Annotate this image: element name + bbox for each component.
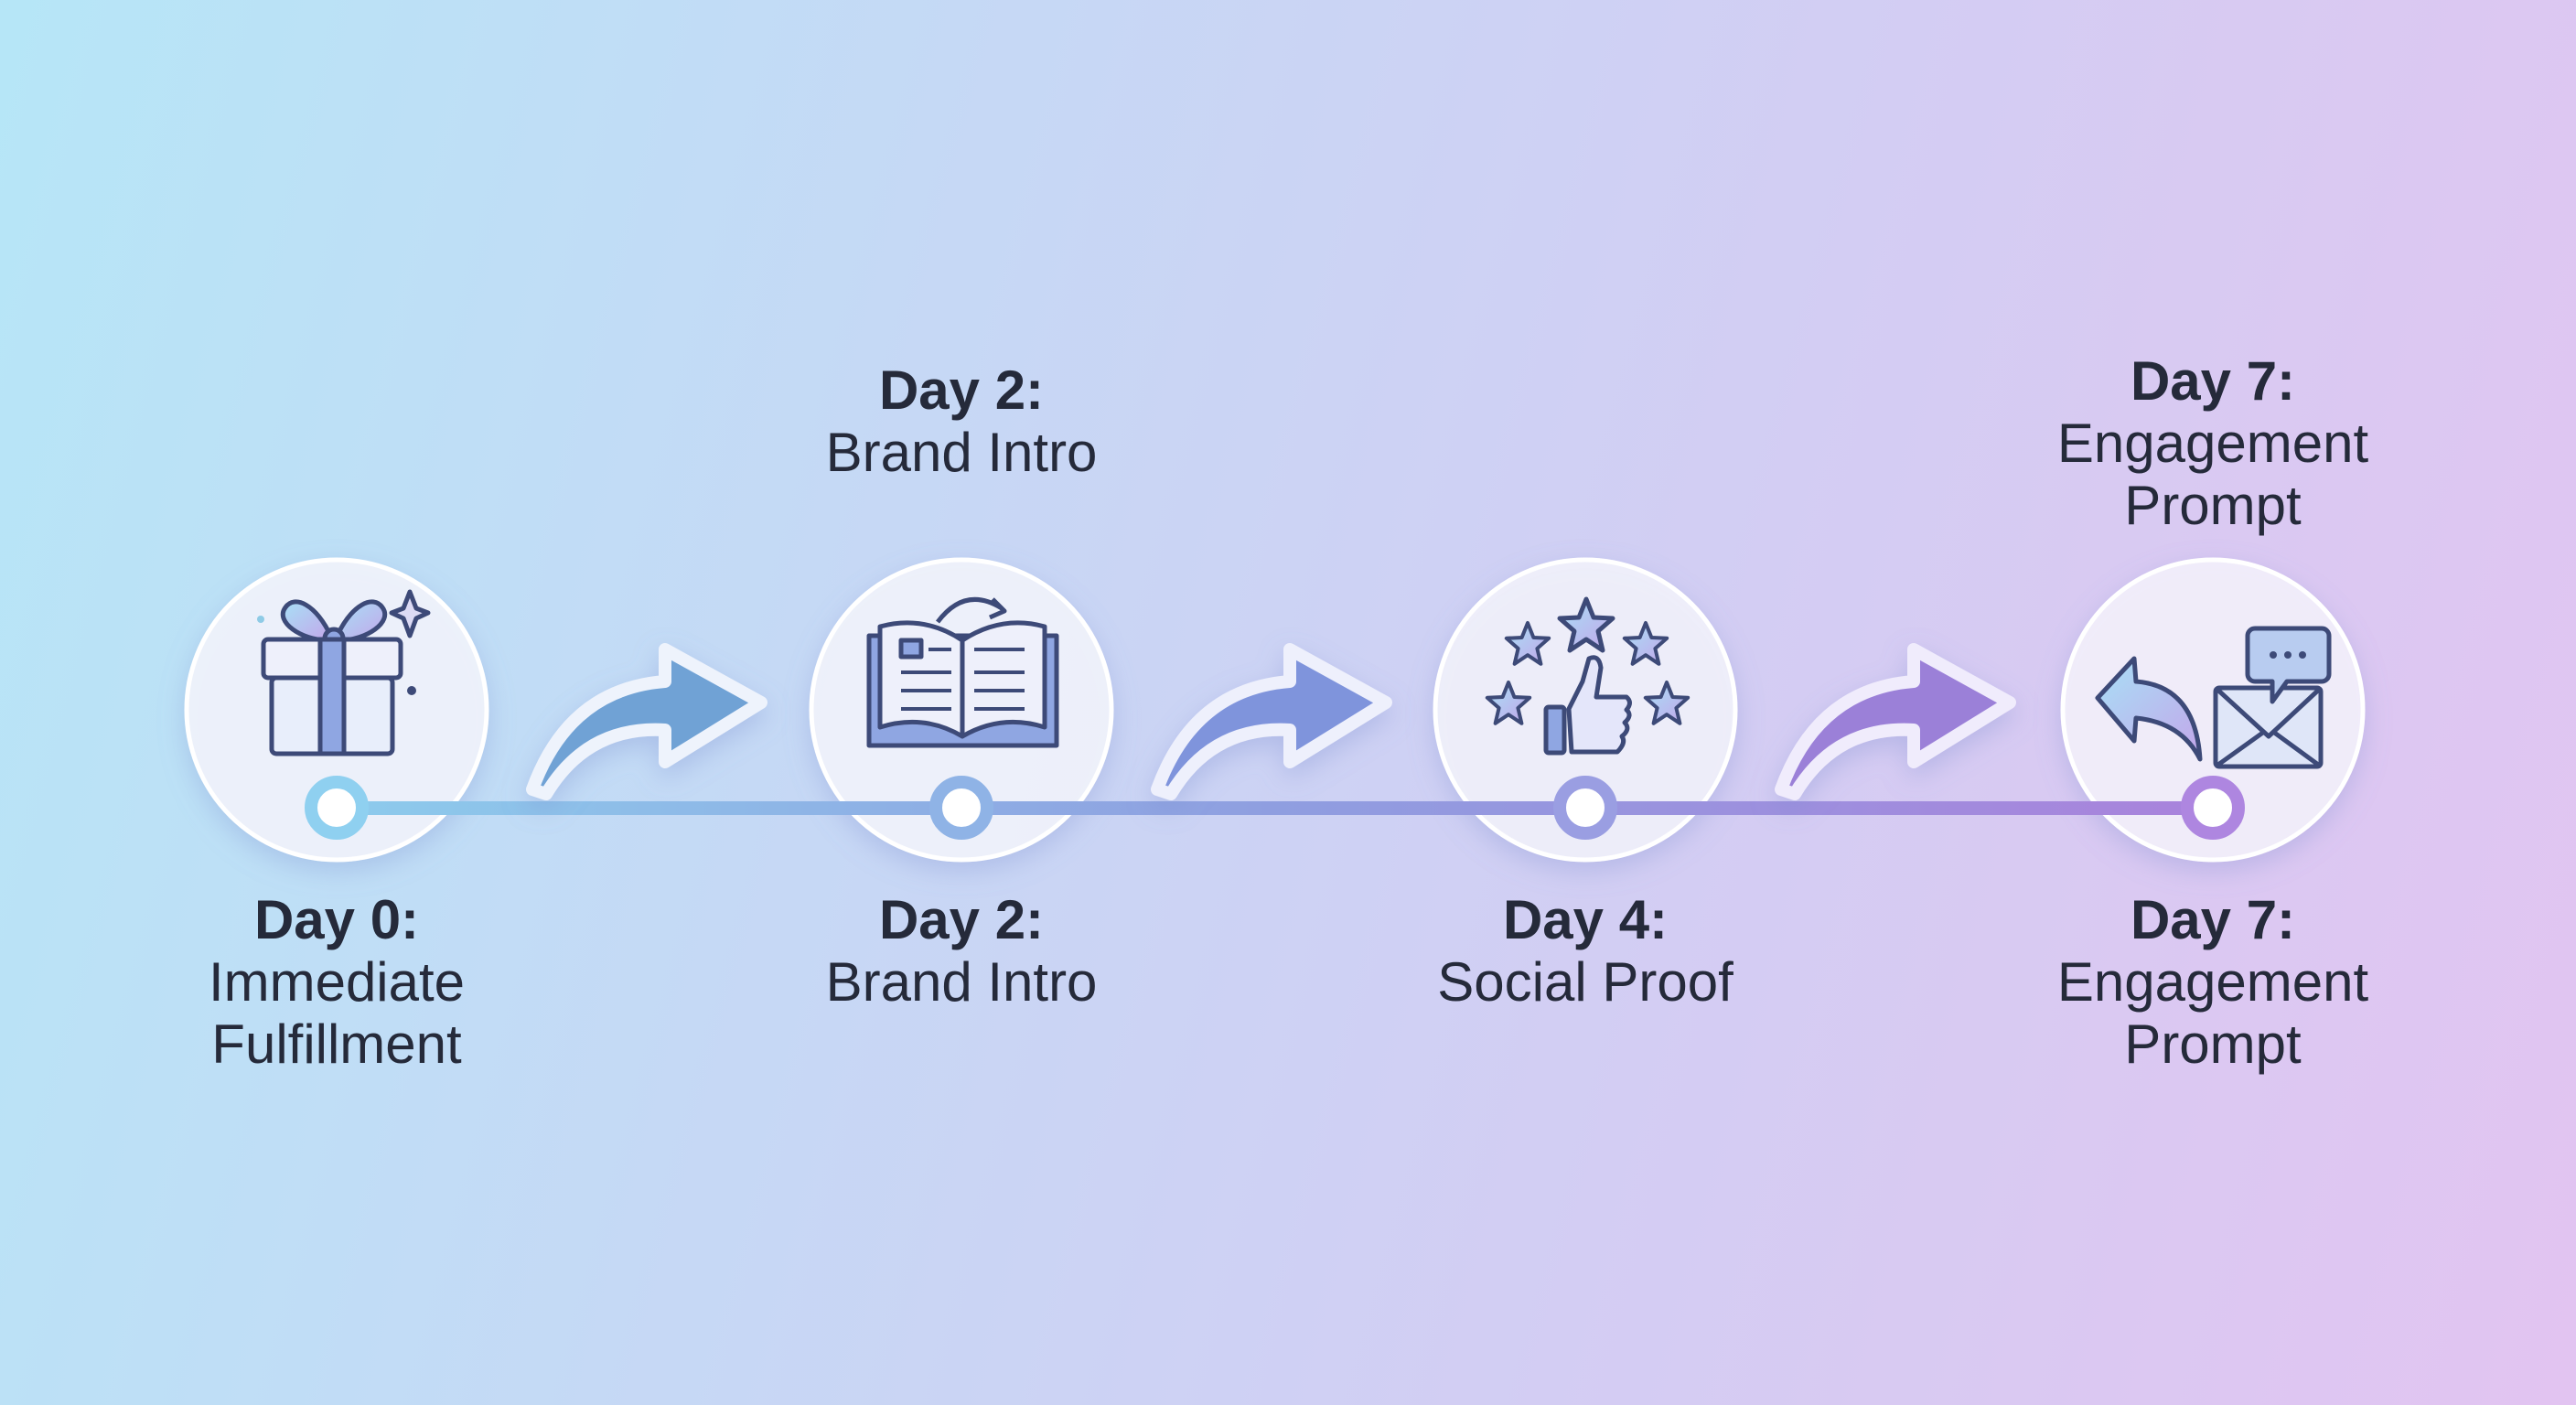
arrow 1	[532, 649, 761, 794]
label: Day 4	[1437, 889, 1733, 1013]
circle 4	[2063, 560, 2363, 860]
label: Day 7 top	[2057, 350, 2368, 536]
label: Day 0: Immediate	[209, 951, 465, 1013]
label: Day 7: Engagement	[2057, 951, 2368, 1013]
icon: book	[869, 599, 1057, 745]
timeline line	[337, 801, 2213, 815]
circle 1	[187, 560, 487, 860]
label: Day 2 top	[826, 359, 1097, 483]
arrow 2	[1157, 649, 1386, 794]
icon: reply and mail	[2098, 628, 2329, 767]
label: Day 7: Prompt	[2124, 1014, 2302, 1075]
label: Day 0: Day 0:	[254, 889, 419, 950]
label: Day 2	[826, 889, 1097, 1013]
label: Day 7 top: Engagement	[2057, 413, 2368, 474]
label: Day 0	[209, 889, 465, 1075]
icon: stars and thumbs up	[1487, 599, 1688, 753]
circle 3	[1435, 560, 1735, 860]
dot 3	[1560, 782, 1611, 833]
icon: gift	[257, 592, 428, 754]
dot 2	[936, 782, 987, 833]
label: Day 2 top: Brand Intro	[826, 422, 1097, 483]
arrow 3	[1781, 649, 2010, 794]
label: Day 7: Day 7:	[2131, 889, 2295, 950]
dot 1	[311, 782, 362, 833]
dot 4	[2187, 782, 2238, 833]
circle 2	[811, 560, 1111, 860]
label: Day 4: Day 4:	[1503, 889, 1668, 950]
label: Day 2: Day 2:	[879, 889, 1044, 950]
label: Day 2 top: Day 2:	[879, 359, 1044, 421]
label: Day 4: Social Proof	[1437, 951, 1733, 1013]
label: Day 7 top: Day 7:	[2131, 350, 2295, 412]
label: Day 0: Fulfillment	[211, 1014, 462, 1075]
label: Day 7 top: Prompt	[2124, 475, 2302, 536]
label: Day 2: Brand Intro	[826, 951, 1097, 1013]
label: Day 7	[2057, 889, 2368, 1075]
